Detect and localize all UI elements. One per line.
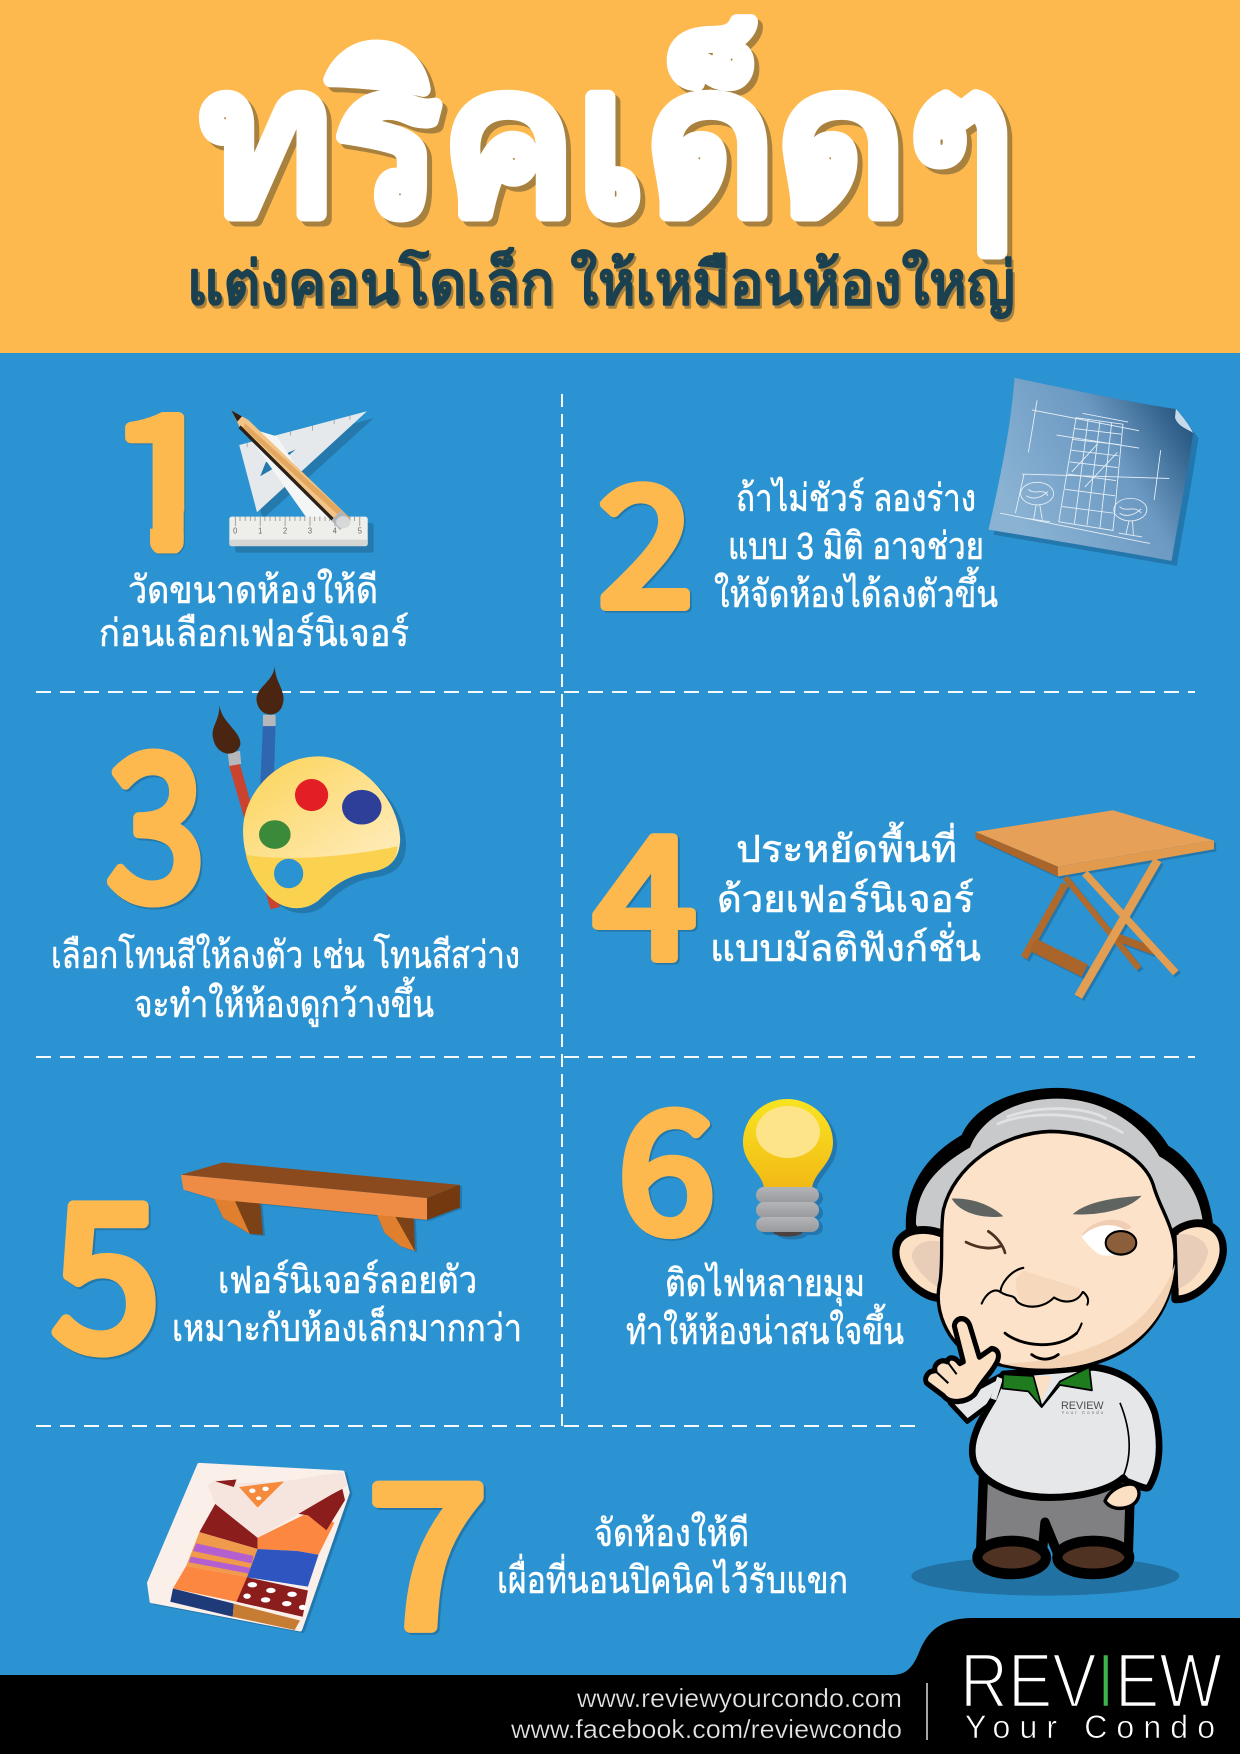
- text: tip 7: [497, 1512, 848, 1602]
- footer web addresses: www.reviewyourcondo.com: [576, 1683, 902, 1713]
- tip 1: [100, 410, 408, 646]
- icon: folded patchwork blanket: [149, 1464, 348, 1630]
- footer divider: [926, 1683, 928, 1740]
- footer logo: Your Condo: [965, 1709, 1215, 1745]
- tip 7: [149, 1400, 848, 1684]
- tip 6: [618, 1040, 904, 1353]
- text: tip 2: [714, 477, 998, 616]
- hair: [906, 1088, 1213, 1281]
- text: tip 6: [626, 1262, 904, 1353]
- icon: palette and brushes: [213, 666, 406, 913]
- text: tip 5: [172, 1259, 522, 1350]
- icon: ruler, set square and pencil: 1: [258, 526, 262, 536]
- text: tip 2: ถ้าไม่ชัวร์ ลองร่าง: [736, 477, 976, 520]
- text: tip 7: เผื่อที่นอนปิคนิคไว้รับแขก: [497, 1554, 848, 1602]
- icon: ruler, set square and pencil: 3: [308, 526, 313, 536]
- text: tip 7: จัดห้องให้ดี: [594, 1512, 749, 1555]
- wink eye: [966, 1231, 1005, 1253]
- text: tip 4: ประหยัดพื้นที่: [736, 821, 957, 871]
- text: tip 4: [710, 821, 981, 970]
- pointing hand: [926, 1319, 998, 1402]
- number 6: 6: [618, 1040, 715, 1281]
- resting hand: [1105, 1484, 1139, 1508]
- eyebrows: [952, 1196, 1142, 1217]
- number 3: 3: [107, 670, 205, 957]
- text: tip 3: จะทำให้ห้องดูกว้างขึ้น: [134, 976, 434, 1027]
- number 1: 1: [106, 336, 223, 601]
- text: tip 4: แบบมัลติฟังก์ชั่น: [710, 922, 981, 970]
- text: tip 1: วัดขนาดห้องให้ดี: [128, 569, 378, 612]
- footer bar: [0, 1618, 1240, 1754]
- text: tip 4: ด้วยเฟอร์นิเจอร์: [717, 878, 974, 921]
- tip 4: [594, 763, 1214, 1007]
- icon: ruler, set square and pencil: 0: [233, 526, 238, 536]
- footer logo: REVIEW: [960, 1638, 1222, 1724]
- tip 5: [52, 1117, 522, 1407]
- number 4: 4: [594, 763, 696, 1007]
- text: tip 6: ติดไฟหลายมุม: [665, 1262, 865, 1306]
- trousers and shoes: [977, 1478, 1131, 1574]
- shirt logo: REVIEW: [1061, 1400, 1105, 1412]
- number 2: 2: [598, 415, 693, 654]
- icon: folding table: [975, 810, 1214, 997]
- tip 3: [51, 666, 520, 1027]
- text: tip 2: แบบ 3 มิติ อาจช่วย: [728, 526, 984, 568]
- icon: ruler, set square and pencil: [229, 410, 374, 553]
- text: tip 5: เฟอร์นิเจอร์ลอยตัว: [218, 1259, 477, 1302]
- open eye: [1082, 1220, 1137, 1256]
- nose and smile: [982, 1268, 1088, 1359]
- face: [938, 1131, 1175, 1370]
- text: tip 3: เลือกโทนสีให้ลงตัว เช่น โทนสีสว่าง: [51, 933, 520, 977]
- number 7: 7: [368, 1400, 487, 1684]
- text: tip 5: เหมาะกับห้องเล็กมากกว่า: [172, 1305, 522, 1350]
- collar: [1002, 1367, 1092, 1407]
- icon: ruler, set square and pencil: 4: [333, 526, 338, 536]
- text: tip 1: [99, 569, 409, 655]
- shirt logo: Your Condo: [1061, 1410, 1104, 1415]
- header band: [0, 0, 1240, 353]
- text: tip 2: ให้จัดห้องได้ลงตัวขึ้น: [714, 566, 998, 616]
- footer web addresses: www.facebook.com/reviewcondo: [510, 1714, 902, 1744]
- text: tip 3: [51, 933, 520, 1027]
- number 5: 5: [52, 1117, 160, 1407]
- icon: blueprint: [988, 378, 1198, 566]
- footer web addresses: [510, 1683, 902, 1744]
- shirt and arms: [950, 1367, 1159, 1497]
- icon: floating shelf: [181, 1162, 460, 1251]
- tip 2: [598, 378, 1198, 654]
- subtitle: แต่งคอนโดเล็ก ให้เหมือนห้องใหญ่: [187, 248, 1015, 318]
- title: ทริคเด็ดๆ: [200, 22, 1015, 259]
- text: tip 6: ทำให้ห้องน่าสนใจขึ้น: [626, 1303, 904, 1353]
- ears: [896, 1223, 1223, 1299]
- dashed grid dividers: [36, 394, 1195, 1426]
- text: tip 1: ก่อนเลือกเฟอร์นิเจอร์: [99, 612, 409, 655]
- mascot: winking old man: [896, 1088, 1223, 1596]
- ground shadow: [911, 1556, 1179, 1596]
- icon: ruler, set square and pencil: 2: [283, 526, 287, 536]
- icon: ruler, set square and pencil: 5: [358, 526, 362, 536]
- icon: light bulb: [743, 1099, 833, 1236]
